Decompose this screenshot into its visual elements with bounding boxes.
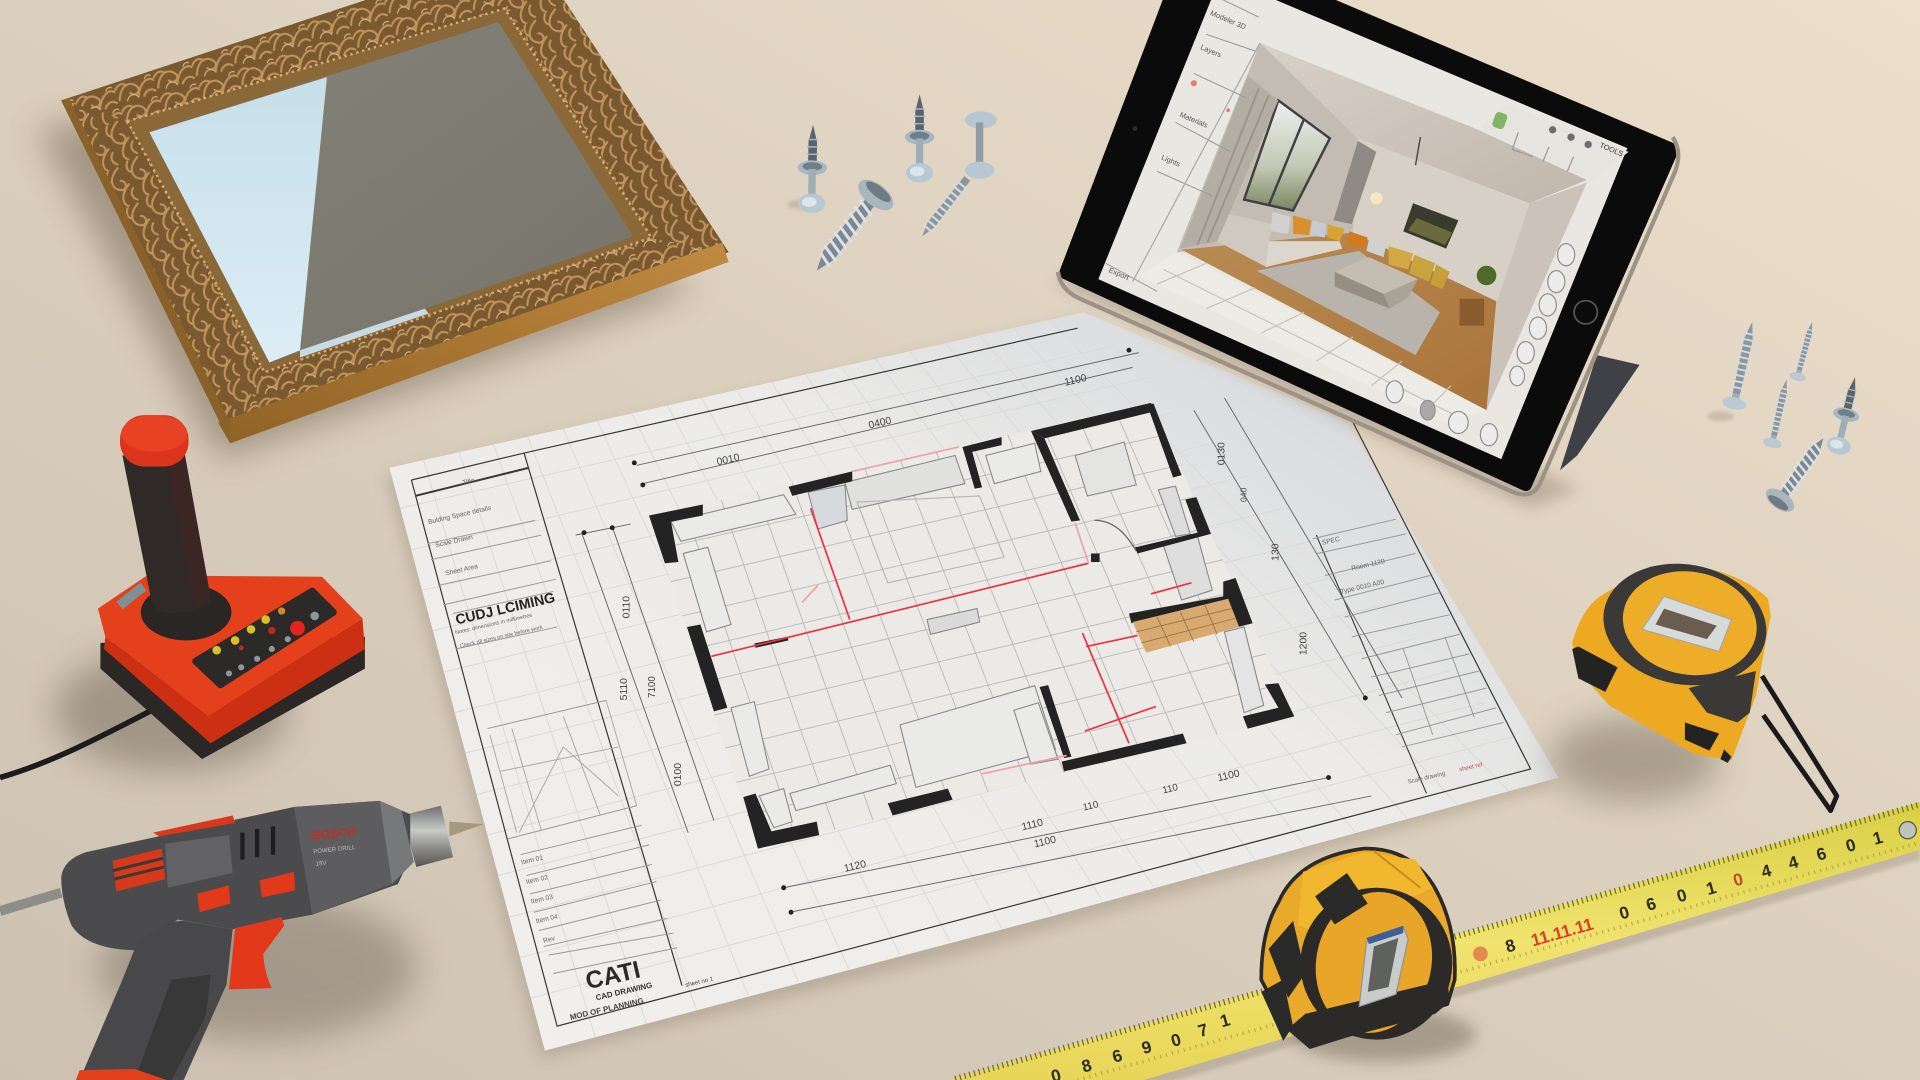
left title block: Sheet Area bbox=[445, 563, 479, 577]
dimension lines and labels: 1110 bbox=[1021, 818, 1044, 833]
dimension lines and labels: 1200 bbox=[1299, 632, 1310, 655]
left title block: sheet no 1 bbox=[685, 976, 715, 989]
metal hook bbox=[1899, 822, 1916, 839]
dimension lines and labels bbox=[576, 348, 1402, 915]
left side panel: Modeler 3D bbox=[1209, 8, 1247, 31]
left title block: Notes: dimensions in millimetres bbox=[455, 613, 533, 636]
wood floor patch bbox=[1133, 599, 1239, 653]
brand label: POWER DRILL bbox=[313, 844, 356, 855]
metal clip bbox=[1359, 927, 1408, 1007]
floor plan blueprint sheet bbox=[386, 312, 1559, 1058]
left title block: MOD OF PLANNING bbox=[569, 996, 645, 1022]
furniture outlines bbox=[671, 442, 1264, 828]
tape numbers bbox=[1049, 827, 1885, 1080]
control panel bbox=[196, 591, 333, 684]
right schedule block: sheet ref bbox=[1458, 761, 1483, 773]
right schedule block: Scale drawing bbox=[1407, 770, 1446, 786]
dimension lines and labels: 110 bbox=[1082, 799, 1100, 814]
tape numbers: 0 bbox=[1731, 869, 1745, 890]
left side panel: Export bbox=[1107, 265, 1130, 282]
coffee table bbox=[1335, 257, 1418, 294]
tape numbers: 0 bbox=[1169, 1029, 1183, 1051]
tape numbers: 1 bbox=[1870, 827, 1885, 849]
tape numbers: 6 bbox=[1644, 893, 1658, 915]
base bbox=[100, 637, 365, 759]
dark ring and yellow dial bbox=[1286, 874, 1466, 1054]
tape numbers: 6 bbox=[1814, 843, 1829, 865]
3D room bbox=[1139, 43, 1587, 422]
dimension lines and labels: 110 bbox=[1161, 782, 1180, 796]
left title block: CATI bbox=[583, 956, 643, 995]
left title block: Item 04 bbox=[535, 913, 559, 925]
measuring tape blade bbox=[949, 802, 1920, 1080]
dimension lines and labels: 5110 bbox=[619, 678, 630, 700]
mirror with ornate gold frame bbox=[37, 0, 729, 459]
left title block bbox=[427, 477, 715, 1022]
power cord bbox=[0, 893, 61, 911]
right schedule block: Type 0010 A00 bbox=[1340, 579, 1385, 596]
left title block: Item 01 bbox=[521, 855, 544, 866]
red buttons bbox=[197, 872, 295, 912]
tape numbers: 4 bbox=[1759, 860, 1774, 882]
left title block: Title bbox=[462, 477, 476, 487]
dimension lines and labels: 0010 bbox=[716, 452, 741, 468]
rubber grip pads bbox=[1261, 873, 1368, 1041]
metal window bbox=[1642, 596, 1731, 651]
trigger bbox=[229, 917, 284, 989]
chuck bbox=[402, 806, 453, 867]
dimension lines and labels: 1100 bbox=[1064, 373, 1088, 389]
red electrical lines bbox=[711, 447, 1191, 774]
black vents bbox=[242, 827, 273, 860]
dimension lines and labels: 040 bbox=[1239, 488, 1249, 502]
tape numbers: 1 bbox=[1704, 877, 1719, 899]
tape numbers: 0 bbox=[1617, 902, 1631, 923]
dimension lines and labels: 1100 bbox=[1217, 768, 1241, 784]
dimension lines and labels: 0100 bbox=[673, 763, 684, 786]
red control box with joystick bbox=[0, 415, 365, 778]
base foot bbox=[1288, 980, 1450, 1047]
tape numbers: 9 bbox=[1139, 1036, 1154, 1058]
dimension lines and labels: 0110 bbox=[621, 596, 632, 618]
screws: right group bbox=[1707, 319, 1868, 516]
left title block: CUDJ LCIMING bbox=[454, 589, 557, 627]
dimension lines and labels: 1120 bbox=[843, 859, 868, 875]
tablet stand bbox=[1560, 355, 1640, 470]
left title block: Item 02 bbox=[525, 874, 549, 886]
right schedule block: SPEC bbox=[1321, 536, 1341, 547]
floor plan drawing bbox=[649, 403, 1294, 849]
wrist strap bbox=[1762, 676, 1837, 811]
screen bbox=[1098, 0, 1627, 459]
side pads bbox=[1572, 647, 1731, 763]
right schedule block: Room 1120 bbox=[1351, 558, 1386, 573]
dark ring and dial bbox=[1594, 551, 1776, 698]
left title block: Item 03 bbox=[530, 894, 554, 906]
tape numbers: 6 bbox=[1110, 1045, 1125, 1067]
dimension lines and labels: 0400 bbox=[868, 416, 893, 431]
paper sheet bbox=[389, 312, 1559, 1051]
tablet body bbox=[1065, 0, 1673, 485]
left side panel bbox=[1106, 0, 1260, 291]
power drill bbox=[0, 801, 484, 1080]
white tile floor bbox=[1157, 262, 1486, 414]
front camera bbox=[1133, 126, 1138, 131]
tape numbers: 7 bbox=[1196, 1019, 1210, 1041]
tape numbers: 0 bbox=[1843, 834, 1858, 856]
right toolbar icons bbox=[1386, 244, 1575, 446]
dimension lines and labels: 7100 bbox=[647, 676, 658, 698]
left side panel: Materials bbox=[1178, 110, 1210, 130]
tape numbers: 1 bbox=[1218, 1009, 1233, 1031]
drill housing bbox=[61, 801, 410, 950]
tablet showing 3D room render bbox=[1053, 0, 1678, 508]
tape measure: bottom bbox=[1261, 849, 1476, 1062]
left side panel: Layers bbox=[1199, 43, 1223, 60]
top toolbar bbox=[1479, 104, 1629, 181]
dimension lines and labels: 1100 bbox=[1033, 834, 1057, 850]
tape numbers: 4 bbox=[1786, 851, 1801, 873]
tape numbers: 8 bbox=[1503, 935, 1518, 956]
left title block: Bulding Space details bbox=[427, 505, 493, 526]
tape numbers: 11.11.11 bbox=[1529, 913, 1596, 950]
sheet border and columns bbox=[411, 328, 1531, 1026]
joystick handle bbox=[141, 584, 231, 640]
left title block: Rev bbox=[543, 935, 556, 945]
right schedule block bbox=[1313, 519, 1504, 786]
left title block: Scale Drawn bbox=[435, 534, 474, 549]
brand label bbox=[311, 824, 357, 868]
plan walls bbox=[649, 403, 1294, 849]
left title block: Check all sizes on site before work bbox=[460, 625, 544, 650]
red vents bbox=[113, 849, 165, 891]
red top strip bbox=[153, 816, 235, 836]
screws: top group bbox=[787, 94, 997, 283]
dimension lines and labels: 130 bbox=[1270, 543, 1281, 561]
left title block: CAD DRAWING bbox=[595, 981, 653, 1002]
cable bbox=[0, 708, 157, 778]
tape numbers: 8 bbox=[1079, 1055, 1094, 1076]
brand label: 18V bbox=[315, 860, 328, 868]
brand label: BOSCH bbox=[311, 824, 357, 843]
left side panel: Lights bbox=[1160, 153, 1182, 169]
plan floor with tile grid bbox=[668, 411, 1280, 830]
home button bbox=[1574, 301, 1597, 324]
plant and lamp bbox=[1477, 266, 1496, 285]
handle bbox=[80, 921, 233, 1080]
silver edge bbox=[1058, 137, 1678, 494]
sheet grid bbox=[400, 320, 1516, 1037]
dimension lines and labels: 0130 bbox=[1216, 442, 1227, 465]
tape measure: top right bbox=[1549, 551, 1837, 811]
display plate bbox=[165, 835, 233, 888]
top toolbar: TOOLS bbox=[1598, 140, 1625, 158]
sofa bbox=[1217, 214, 1342, 267]
tape numbers: 0 bbox=[1674, 884, 1689, 906]
